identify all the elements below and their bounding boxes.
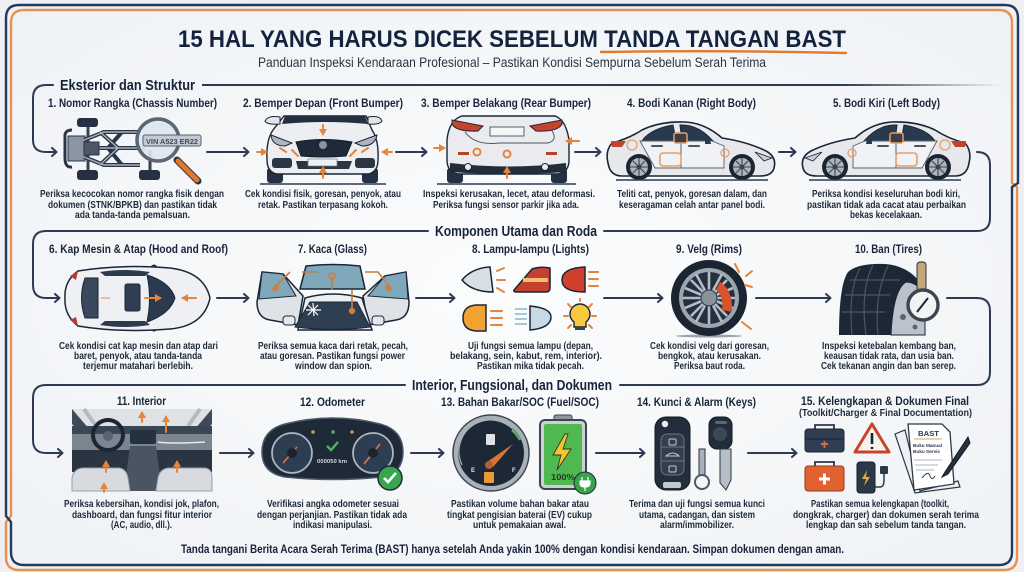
icon: battery: 100%	[551, 473, 575, 482]
description 13: tingkat pengisian baterai (EV) cukup	[447, 510, 592, 521]
description 10: keausan tidak rata, dan usia ban.	[824, 351, 954, 362]
heading 14: 14. Kunci & Alarm (Keys)	[637, 395, 756, 409]
heading 3: 3. Bemper Belakang (Rear Bumper)	[421, 96, 591, 110]
icon: documents and pen: Buku Servis	[913, 449, 941, 454]
description 3: Inspeksi kerusakan, lecet, atau deformasi.	[423, 189, 595, 200]
subheading 15: (Toolkit/Charger & Final Documentation)	[799, 408, 972, 419]
icon: fuel gauge	[453, 415, 529, 491]
description 10: Cek tekanan angin dan ban serep.	[821, 361, 956, 372]
step 6: kap mesin dan atap	[49, 242, 228, 372]
description 5: bekas kecelakaan.	[850, 210, 922, 221]
step 7: kaca	[257, 242, 409, 372]
step 2: bemper depan	[243, 96, 403, 211]
heading 4: 4. Bodi Kanan (Right Body)	[627, 96, 756, 110]
description 9: bengkok, atau kerusakan.	[658, 351, 761, 362]
icon: first aid kit	[805, 462, 844, 491]
description 7: window dan spion.	[294, 361, 372, 372]
description 11: (AC, audio, dll.).	[111, 520, 172, 531]
description 5: Periksa kondisi keseluruhan bodi kiri,	[812, 189, 960, 200]
description 5: pastikan tidak ada cacat atau perbaikan	[807, 200, 966, 211]
heading 1: 1. Nomor Rangka (Chassis Number)	[48, 96, 217, 110]
icon: bulb	[564, 299, 596, 330]
description 7: Periksa semua kaca dari retak, pecah,	[258, 341, 408, 352]
step 5: bodi kiri	[802, 96, 970, 221]
connector: row 2 to row 3	[33, 298, 990, 453]
description 5	[807, 189, 966, 221]
section heading: interior: Interior, Fungsional, dan Dokumen	[412, 377, 612, 394]
description 2	[245, 189, 401, 211]
icon: documents and pen: Buku Manual	[913, 443, 942, 448]
description 7: atau goresan. Pastikan fungsi power	[260, 351, 405, 362]
icon: sedan right side	[607, 122, 775, 180]
icon: warning triangle	[855, 424, 889, 452]
arrows row 3	[220, 452, 796, 454]
description 8: Pastikan mika tidak pecah.	[477, 361, 584, 372]
title: 15 HAL YANG HARUS DICEK SEBELUM TANDA TANGAN BAST	[178, 26, 846, 53]
description 13: untuk pemakaian awal.	[473, 520, 566, 531]
heading 13: 13. Bahan Bakar/SOC (Fuel/SOC)	[441, 395, 599, 409]
arrows row 2	[217, 297, 830, 299]
step 3: bemper belakang	[421, 96, 595, 211]
section heading: eksterior: Eksterior dan Struktur	[60, 77, 195, 94]
description 15: dongkrak, charger) dan dokumen serah terima	[793, 510, 979, 521]
heading 8: 8. Lampu-lampu (Lights)	[472, 242, 589, 256]
description 3	[423, 189, 595, 211]
description 9: Periksa baut roda.	[674, 361, 745, 372]
description 1	[40, 189, 224, 221]
icon: tire with gauge	[839, 262, 938, 335]
icon: wheel rim	[671, 260, 752, 338]
subtitle: Panduan Inspeksi Kendaraan Profesional – Pastikan Kondisi Sempurna Sebelum Serah Terima	[258, 54, 766, 70]
step 11: interior	[64, 394, 219, 531]
icon: fuel gauge: F	[512, 468, 516, 474]
icon: chassis with magnifier	[65, 118, 201, 181]
description 1: Periksa kecocokan nomor rangka fisik dengan	[40, 189, 224, 200]
step 4: bodi kanan	[607, 96, 775, 211]
icon: instrument cluster	[262, 418, 403, 490]
icon: battery	[540, 415, 596, 494]
icon: fuel gauge: E	[471, 468, 475, 474]
description 10	[821, 341, 956, 372]
description 6	[59, 341, 218, 372]
description 11: Periksa kebersihan, kondisi jok, plafon,	[64, 499, 219, 510]
description 4: Teliti cat, penyok, goresan dalam, dan	[617, 189, 767, 200]
icon: car glass	[257, 264, 409, 330]
arrows row 1	[207, 151, 795, 153]
description 13: Pastikan volume bahan bakar atau	[451, 499, 589, 510]
description 12	[257, 499, 407, 531]
section rule: eksterior	[202, 84, 1002, 86]
description 12: indikasi manipulasi.	[293, 520, 372, 531]
icon: blue lamp	[515, 306, 551, 330]
heading 7: 7. Kaca (Glass)	[298, 242, 367, 256]
step 10: ban	[821, 242, 956, 372]
description 4: keseragaman celah antar panel bodi.	[619, 200, 765, 211]
description 4	[617, 189, 767, 211]
description 12: dengan perjanjian. Pastikan tidak ada	[257, 510, 407, 521]
heading 12: 12. Odometer	[300, 395, 365, 409]
section heading: komponen: Komponen Utama dan Roda	[435, 223, 598, 240]
icon: headlight	[462, 267, 505, 292]
description 8: Uji fungsi semua lampu (depan,	[468, 341, 593, 352]
description 3: Periksa fungsi sensor parkir jika ada.	[433, 200, 579, 211]
step 13: bahan bakar	[441, 395, 599, 531]
icon: orange lamp	[463, 305, 502, 331]
description 14	[629, 499, 765, 531]
description 1: dokumen (STNK/BPKB) dan pastikan tidak	[48, 200, 217, 211]
description 13	[447, 499, 592, 531]
description 14: alarm/immobilizer.	[660, 520, 734, 531]
description 6: terjemur matahari berlebih.	[83, 361, 193, 372]
icon: red lamp	[562, 267, 598, 292]
icon: toolbox	[805, 425, 844, 452]
connector: into row 1	[33, 85, 56, 152]
description 1: ada tanda-tanda pemalsuan.	[75, 210, 190, 221]
description 11	[64, 499, 219, 531]
heading 11: 11. Interior	[117, 394, 166, 408]
connector: row 1 to row 2	[33, 152, 990, 298]
description 2: Cek kondisi fisik, goresan, penyok, atau	[245, 189, 401, 200]
heading 6: 6. Kap Mesin & Atap (Hood and Roof)	[49, 242, 228, 256]
icon: sedan left side	[802, 122, 970, 180]
icon: car front	[257, 116, 392, 184]
title underline accent	[601, 51, 846, 53]
icon: car top view	[65, 265, 210, 331]
icon: spare key	[695, 449, 709, 489]
step 14: kunci dan alarm	[629, 395, 765, 531]
icon: documents and pen	[895, 424, 970, 493]
heading 5: 5. Bodi Kiri (Left Body)	[833, 96, 940, 110]
icon: portable charger	[857, 462, 888, 493]
description 14: Terima dan uji fungsi semua kunci	[629, 499, 765, 510]
description 8: belakang, sein, kabut, rem, interior).	[450, 351, 602, 362]
description 6: baret, penyok, atau tanda-tanda	[74, 351, 202, 362]
icon: tail light	[514, 267, 550, 292]
description 7	[258, 341, 408, 372]
step 12: odometer	[257, 395, 407, 531]
description 2: retak. Pastikan terpasang kokoh.	[258, 200, 388, 211]
icon: car interior	[72, 409, 212, 492]
step 8: lampu-lampu	[450, 242, 602, 372]
description 11: dashboard, dan fungsi fitur interior	[72, 510, 212, 521]
step 1: nomor rangka	[40, 96, 224, 221]
step 15: kelengkapan dan dokumen final	[793, 394, 979, 531]
description 15: lengkap dan sah sebelum tanda tangan.	[806, 520, 966, 531]
icon: instrument cluster: 000050 km	[317, 459, 347, 465]
heading 10: 10. Ban (Tires)	[855, 242, 922, 256]
icon: remote key fob	[655, 417, 690, 490]
icon: car rear	[434, 116, 579, 184]
description 15: Pastikan semua kelengkapan (toolkit,	[811, 499, 949, 510]
icon: documents and pen: BAST	[918, 429, 939, 438]
description 15	[793, 499, 979, 531]
footer note: Tanda tangani Berita Acara Serah Terima (BAST) hanya setelah Anda yakin 100% dengan kondisi kendaraan. Simpan dokumen dengan aman.	[181, 542, 844, 556]
description 14: utama, cadangan, dan sistem	[639, 510, 755, 521]
icon: main key	[709, 417, 732, 490]
heading 2: 2. Bemper Depan (Front Bumper)	[243, 96, 403, 110]
heading 9: 9. Velg (Rims)	[676, 242, 742, 256]
description 10: Inspeksi ketebalan kembang ban,	[822, 341, 956, 352]
icon: chassis with magnifier: VIN A523 ER22	[146, 137, 198, 146]
description 8	[450, 341, 602, 372]
description 9: Cek kondisi velg dari goresan,	[650, 341, 769, 352]
description 6: Cek kondisi cat kap mesin dan atap dari	[59, 341, 218, 352]
description 12: Verifikasi angka odometer sesuai	[267, 499, 399, 510]
description 9	[650, 341, 769, 372]
step 9: velg	[650, 242, 769, 372]
heading 15: 15. Kelengkapan & Dokumen Final	[801, 394, 969, 408]
